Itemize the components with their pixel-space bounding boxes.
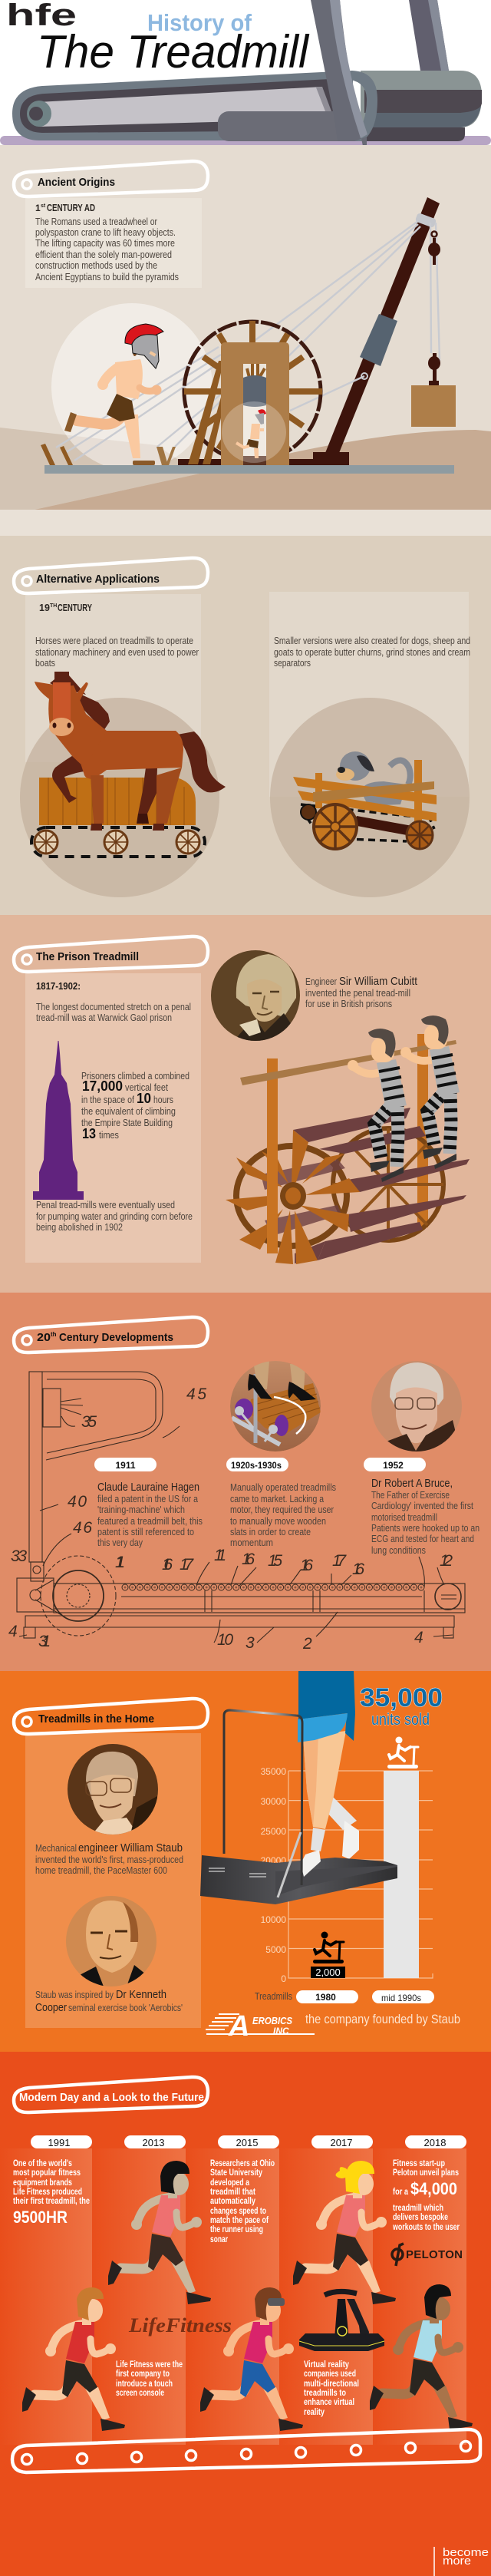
text panel: Penal tread-mills were eventually used (36, 1200, 175, 1210)
text: manual treadmills: slats in order to create (230, 1527, 311, 1537)
portrait: robert bruce (371, 1361, 462, 1451)
prisoner figure front (348, 1029, 407, 1182)
text panel left: Horses were placed on treadmills to operate (35, 636, 193, 646)
label: 1911 (94, 1458, 157, 1471)
text panel: engineer William Staub (78, 1841, 183, 1854)
text: 2017 (304, 2360, 359, 2417)
text panel: The Romans used a treadwheel or (35, 216, 157, 227)
label: 1991 (31, 2135, 92, 2148)
text: bruce: lung conditions (371, 1545, 426, 1556)
text panel: 17,000 (82, 1078, 123, 1094)
panel: modern day (0, 2052, 491, 2576)
icon: vr treadmill (299, 2291, 384, 2351)
text panel right (269, 592, 470, 797)
text panel: Staub was inspired by (35, 1990, 114, 2000)
patent reference numbers: 16 (162, 1556, 173, 1574)
text panel (25, 973, 201, 1263)
heading: 20th century: Century Developments (59, 1331, 173, 1344)
text panel: the Empire State Building (81, 1118, 173, 1128)
logo: life fitness: LifeFitness (128, 2314, 232, 2337)
dog treadmill cart illustration (293, 751, 437, 849)
patent reference numbers: 15 (268, 1552, 282, 1570)
text: 2015: sonar (210, 2235, 228, 2244)
background dunes (0, 428, 491, 536)
text panel left: boats (35, 658, 55, 669)
text: cubitt caption: for use in British prisons (305, 999, 392, 1009)
label: treadmills: Treadmills (255, 1991, 292, 2002)
bar chart: 30000 (261, 1796, 286, 1807)
label: mid 1990s (372, 1990, 434, 2003)
bar: mid 1990s (384, 1771, 419, 1978)
runner: 2018 (370, 2284, 473, 2429)
text panel (25, 198, 202, 288)
text panel: 13 (82, 1126, 96, 1141)
text: bruce (371, 1477, 479, 1556)
floor strip (0, 136, 491, 145)
text panel: The longest documented stretch on a penal (36, 1002, 191, 1012)
text: 2018: Peloton unveil plans (393, 2168, 459, 2178)
text: 2015 (210, 2159, 275, 2244)
text: 2018: treadmill which (393, 2204, 443, 2213)
text: 1991: most popular fitness (13, 2168, 81, 2178)
patent reference numbers: 4 (414, 1629, 423, 1646)
text: hagen: patent is still referenced to (97, 1527, 194, 1537)
bar chart: 10000 (261, 1914, 286, 1925)
text: bruce: Cardiology' invented the first (371, 1501, 473, 1511)
text: 2018 (392, 2159, 460, 2232)
heading: 20th century (14, 1317, 208, 1352)
patent reference numbers: 3 (246, 1634, 255, 1652)
text: 2015: State University (210, 2168, 262, 2178)
heading: treadmills in the home (14, 1699, 208, 1734)
runner: 2013 (108, 2161, 211, 2304)
text: bruce: The Father of Exercise (371, 1490, 450, 1501)
portrait: sir william cubitt (211, 950, 303, 1042)
text: 2013: screen console (116, 2389, 164, 2398)
patent reference numbers: 46 (73, 1519, 92, 1537)
bar chart: 20000 (261, 1855, 286, 1866)
patent drawing (17, 1372, 465, 1643)
icon: empire state building (33, 1041, 84, 1200)
text: manual treadmills: to manually move wooden (230, 1516, 326, 1527)
roman runner (64, 324, 163, 465)
text: 2015: changes speed to (210, 2207, 266, 2216)
text panel left (25, 594, 201, 762)
patent reference numbers (8, 1385, 453, 1653)
text: cubitt caption (305, 975, 418, 1009)
text: 2017: Virtual reality (304, 2360, 349, 2370)
portrait: kenneth cooper (66, 1896, 157, 1986)
patent reference numbers: 17 (332, 1552, 347, 1570)
title line: History of: History of (147, 9, 252, 36)
patent reference numbers: 33 (11, 1547, 27, 1565)
text panel: seminal exercise book 'Aerobics' (68, 2003, 183, 2013)
logo: peloton (392, 2244, 463, 2266)
text panel: Ancient Egyptians to build the pyramids (35, 272, 179, 282)
text panel left: TH (50, 603, 57, 609)
text: hagen: Claude Lauraine Hagen (97, 1481, 199, 1494)
label: 2017 (311, 2135, 373, 2148)
text panel: tread-mill was at Warwick Gaol prison (36, 1012, 172, 1023)
heading: modern day: Modern Day and a Look to the Future (19, 2091, 204, 2104)
text: bruce: motorised treadmill (371, 1512, 437, 1523)
text: 2018: workouts to the user (392, 2223, 460, 2232)
text panel: vertical feet (125, 1082, 168, 1093)
paddles (226, 1130, 360, 1264)
text panel: in the space of (81, 1095, 134, 1105)
text panel right: separators (274, 658, 311, 669)
logo: peloton: PELOTON (406, 2248, 463, 2261)
label: 2018: 2018 (424, 2137, 446, 2148)
text: hagen (97, 1481, 203, 1548)
text: 2013 (116, 2360, 183, 2398)
text panel: home treadmill, the PaceMaster 600 (35, 1865, 167, 1876)
text panel: st (41, 203, 46, 209)
header panel (0, 0, 491, 165)
label: 1980: 1980 (315, 1992, 336, 2003)
panel: the prison treadmill (0, 915, 491, 1293)
text panel: 10 (137, 1091, 151, 1106)
text panel: The lifting capacity was 60 times more (35, 238, 175, 249)
logo: become more (434, 2546, 489, 2576)
bar chart: 0 (281, 1973, 286, 1984)
patent reference numbers: 31 (38, 1633, 51, 1650)
text: 1991: 9500HR (13, 2208, 68, 2227)
heading: alternative applications: Alternative Applications (36, 573, 160, 586)
text panel (25, 1733, 201, 2028)
text: manual treadmills: came to market. Lacking a (230, 1494, 324, 1504)
text: 2017: multi-directional (304, 2379, 359, 2389)
text panel: Mechanical (35, 1843, 77, 1854)
patent reference numbers: 11 (115, 1554, 125, 1571)
label: 2015 (218, 2135, 279, 2148)
text panel: CENTURY AD (47, 203, 95, 213)
text panel: polyspaston crane to lift heavy objects. (35, 227, 176, 238)
patent reference numbers: 16 (352, 1560, 364, 1578)
panel: 20th century developments (0, 1293, 491, 1671)
text: manual treadmills: motor, they required the user (230, 1504, 334, 1515)
panel: alternative applications (0, 536, 491, 915)
icon: black treadmill runner (313, 1931, 344, 1963)
text: 2013: introduce a touch (116, 2379, 173, 2389)
title: The Treadmill: The Treadmill (37, 26, 310, 78)
icon: white treadmill runner (387, 1736, 418, 1769)
heading: prison treadmill: The Prison Treadmill (36, 950, 139, 963)
text: 2015: treadmill that (210, 2188, 255, 2197)
bar chart: 35000 (261, 1766, 286, 1777)
spotlight (51, 303, 213, 471)
patent reference numbers: 45 (186, 1385, 206, 1403)
text: 2015: the runner using (210, 2225, 263, 2234)
label: 2013: 2013 (143, 2137, 164, 2148)
oval left (20, 698, 219, 897)
heading: ancient origins (14, 161, 208, 197)
label: 1952: 1952 (383, 1460, 404, 1471)
stat: 35,000 units sold (360, 1683, 443, 1729)
text: manual treadmills: momentum (230, 1537, 273, 1548)
bar chart: 25000 (261, 1826, 286, 1837)
text panel left: 19 (39, 603, 50, 613)
text: 2018: Fitness start-up (393, 2159, 445, 2168)
text: 2015: match the pace of (210, 2216, 269, 2225)
text: 2013: Life Fitness were the (116, 2360, 183, 2370)
label: 2015: 2015 (236, 2137, 258, 2148)
text: 2017: treadmills to (304, 2389, 346, 2398)
logo: become more: more (443, 2555, 471, 2568)
text panel: invented the world's first, mass-produced (35, 1854, 183, 1865)
patent reference numbers: 17 (180, 1556, 194, 1574)
text: 2018: $4,000 (410, 2179, 457, 2198)
text panel: construction methods used by the (35, 260, 157, 271)
treadmill illustration (12, 0, 482, 165)
text panel: times (99, 1130, 119, 1141)
label: 1980 (296, 1990, 358, 2003)
text: hagen: 'training-machine' which (97, 1504, 185, 1515)
panel: ancient origins (0, 145, 491, 536)
text panel left: CENTURY (58, 603, 92, 613)
bar chart: 5000 (265, 1944, 286, 1955)
prisoner figure rear (400, 1016, 460, 1169)
stat: 35,000 units sold: units sold (371, 1711, 430, 1729)
chart grid and axis (288, 1771, 433, 1978)
patent reference numbers: 12 (440, 1552, 453, 1570)
crane illustration (41, 197, 456, 474)
text: company caption: the company founded by Staub (305, 2012, 460, 2026)
text: 1991 (13, 2159, 90, 2227)
runner: 2015 (200, 2287, 303, 2431)
text panel: 1817-1902: (36, 981, 81, 992)
label: mid 1990s: mid 1990s (381, 1993, 421, 2003)
bar: 1980: 2,000 (315, 1967, 341, 1978)
treadmill belt outline (12, 2429, 480, 2472)
text: 2018: delivers bespoke (393, 2213, 448, 2222)
icon: manual treadmill (230, 1361, 321, 1451)
text: 1991: One of the world's (13, 2159, 72, 2168)
heading: 20th century: 20 (37, 1331, 51, 1344)
patent reference numbers: 35 (81, 1413, 97, 1431)
label: 1911: 1911 (115, 1460, 136, 1471)
treadmill with runner legs (200, 1671, 397, 1904)
panel: treadmills in the home (0, 1671, 491, 2052)
label: 1991: 1991 (48, 2137, 70, 2148)
runner: 2017 (293, 2161, 396, 2304)
logo: aerobics inc: A (228, 2010, 249, 2043)
text panel left: stationary machinery and even used to power (35, 647, 199, 658)
label: 1920s-1930s (226, 1458, 288, 1471)
text panel: being abolished in 1902 (36, 1222, 123, 1233)
text: cubitt caption: invented the penal tread-mill (305, 988, 410, 999)
patent reference numbers: 11 (214, 1547, 226, 1564)
text panel: the equivalent of climbing (81, 1106, 176, 1117)
label: 2013 (124, 2135, 186, 2148)
logo: aerobics inc: EROBICS (252, 2015, 292, 2026)
heading: ancient origins: Ancient Origins (38, 176, 115, 189)
text: 2017: reality (304, 2408, 325, 2417)
logo: aerobics inc (206, 2010, 315, 2043)
text panel: for pumping water and grinding corn before (36, 1211, 193, 1222)
text: 1991: their first treadmill, the (13, 2197, 90, 2206)
text: manual treadmills (230, 1482, 336, 1548)
text panel: Dr Kenneth (116, 1988, 166, 2001)
label: 1920s-1930s: 1920s-1930s (231, 1460, 282, 1471)
label: 2017: 2017 (331, 2137, 352, 2148)
timeline columns (0, 2148, 466, 2445)
text: 1991: Life Fitness produced (13, 2188, 82, 2197)
text: cubitt caption: Engineer (305, 976, 337, 987)
text: 2015: Researchers at Ohio (210, 2159, 275, 2168)
text: 2018: for a (393, 2188, 408, 2197)
portrait: william staub (68, 1744, 158, 1835)
patent reference numbers: 16 (242, 1551, 255, 1568)
text: cubitt caption: Sir William Cubitt (339, 975, 418, 988)
text panel: 1 (35, 203, 41, 213)
heading: 20th century: th (51, 1331, 57, 1338)
text: 1991: equipment brands (13, 2178, 72, 2188)
text: 2017: companies used (304, 2370, 356, 2379)
small runner in lens (236, 409, 266, 458)
label: 1952 (364, 1458, 426, 1471)
treads (261, 1108, 470, 1263)
patent reference numbers: 16 (300, 1557, 313, 1574)
text: 2017: enhance virtual (304, 2398, 354, 2407)
text panel: Prisoners climbed a combined (81, 1071, 189, 1082)
text panel: hours (153, 1095, 173, 1105)
text: hagen: filed a patent in the US for a (97, 1494, 198, 1504)
text: hagen: this very day (97, 1537, 143, 1548)
text: 2013: first company to (116, 2370, 170, 2379)
heading: prison treadmill (14, 936, 208, 972)
heading: treadmills in the home: Treadmills in the Home (38, 1712, 154, 1726)
logo: become more: become (443, 2546, 489, 2559)
text: hagen: featured a treadmill belt, this (97, 1516, 203, 1527)
text panel: efficient than the solely man-powered (35, 249, 172, 260)
logo: aerobics inc: INC (273, 2026, 289, 2036)
text: 2015: developed a (210, 2178, 249, 2188)
patent reference numbers: 10 (217, 1631, 233, 1649)
patent reference numbers: 40 (68, 1493, 87, 1511)
oval right (270, 698, 470, 897)
label: 2018 (405, 2135, 466, 2148)
text: manual treadmills: Manually operated treadmills (230, 1482, 336, 1493)
heading: alternative applications (14, 558, 208, 593)
heading: modern day (14, 2077, 208, 2112)
text: bruce: Dr Robert A Bruce, (371, 1477, 453, 1490)
patent reference numbers: 2 (302, 1635, 312, 1653)
prison treadmill illustration (226, 1016, 470, 1264)
stat: 35,000 units sold: 35,000 (360, 1683, 443, 1712)
text panel: Cooper (35, 2001, 67, 2014)
patent reference numbers: 4 (8, 1623, 18, 1640)
runner: 1991 (22, 2287, 125, 2431)
horse treadmill illustration (31, 672, 226, 857)
text: 2015: automatically (210, 2197, 255, 2206)
bar chart (261, 1736, 433, 1984)
